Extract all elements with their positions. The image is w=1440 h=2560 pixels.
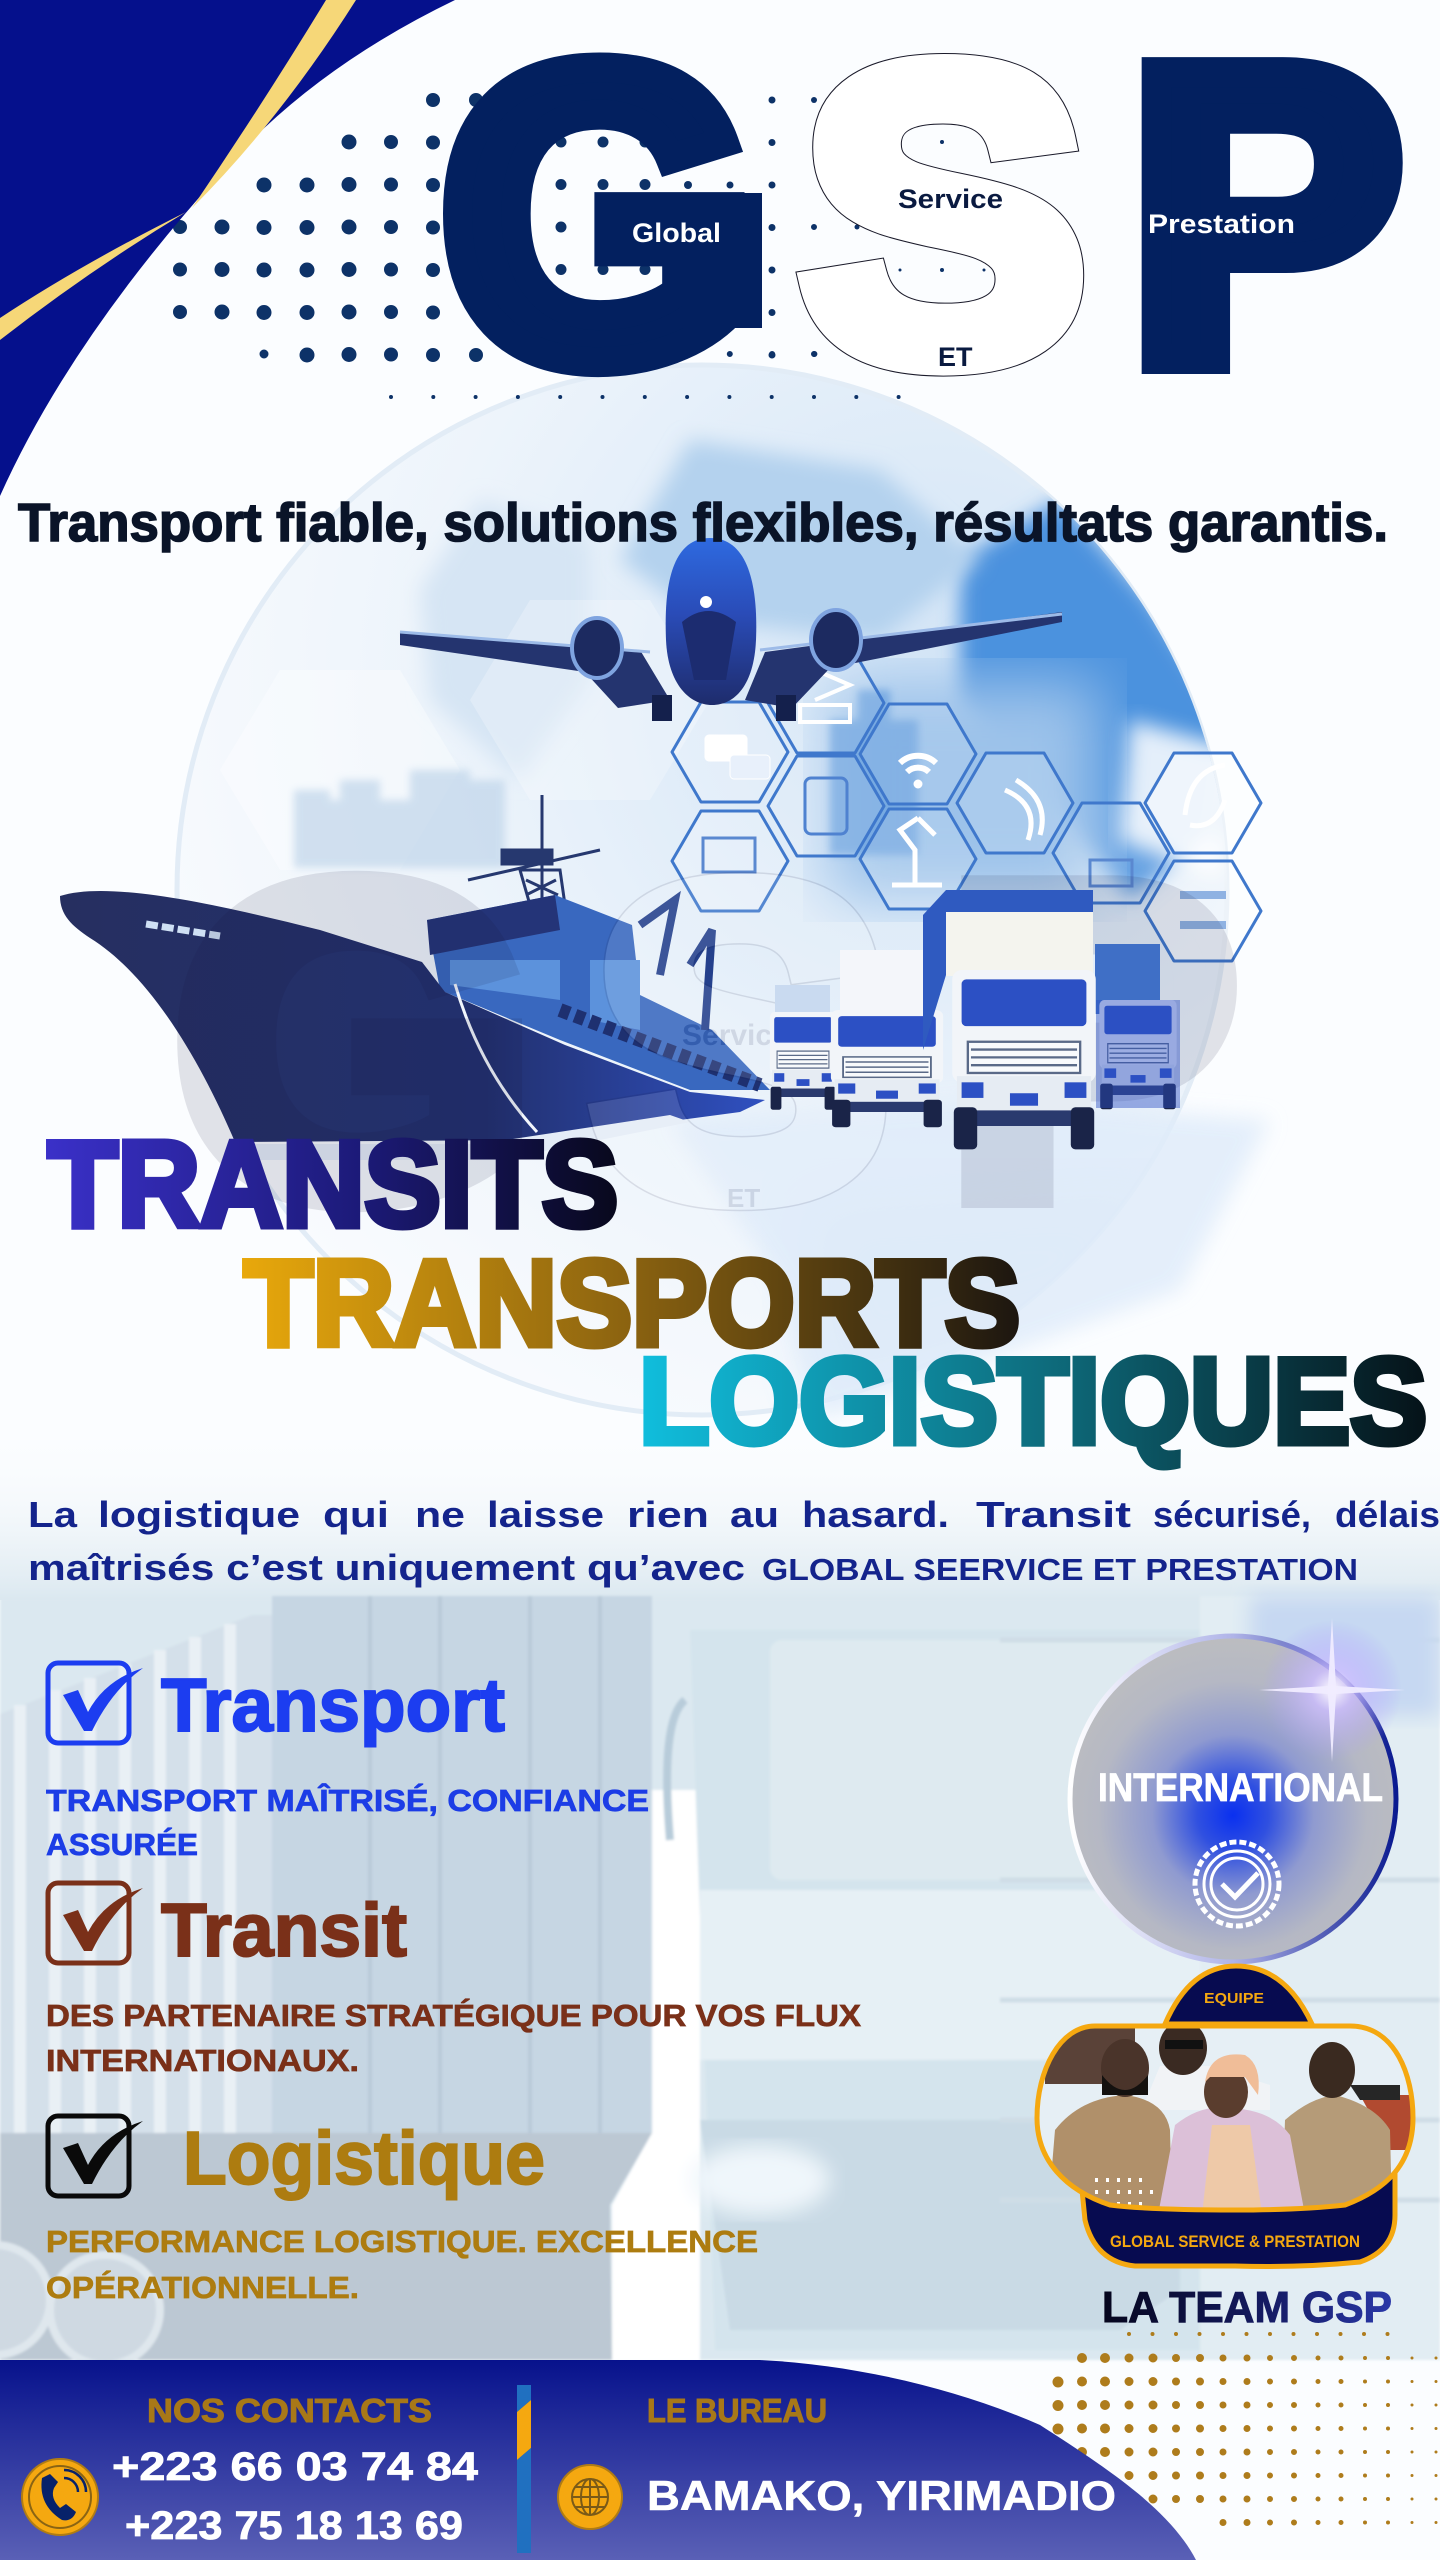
main truck <box>923 890 1096 1149</box>
container side <box>0 1615 280 2133</box>
office address: BAMAKO, YIRIMADIO <box>647 2472 1116 2519</box>
footer panel <box>0 2360 1196 2560</box>
right truck <box>1095 944 1180 1109</box>
team photo frame <box>1030 1966 1420 2266</box>
swoosh top left <box>0 0 455 496</box>
item: transport: Transport <box>161 1663 505 1747</box>
headline: transits: TRANSITS <box>48 1116 618 1252</box>
intro paragraph: laisse <box>487 1494 604 1535</box>
intro paragraph: au <box>730 1494 779 1535</box>
hexagon icons <box>703 670 1226 925</box>
dotted pattern <box>180 100 984 360</box>
ghost GSP watermark: S <box>590 796 890 1287</box>
ghost GSP watermark: P <box>947 796 1237 1287</box>
international badge: INTERNATIONAL <box>1098 1766 1383 1810</box>
airplane <box>400 538 1062 721</box>
white gap <box>612 1790 700 2360</box>
top banner <box>1165 1966 1312 2024</box>
wings <box>400 632 670 708</box>
ghost GSP watermark: ET <box>727 1183 760 1213</box>
ghost GSP watermark: S <box>590 796 890 1287</box>
city skyline <box>294 770 505 868</box>
intro paragraph: La <box>28 1494 78 1535</box>
divider <box>517 2385 531 2553</box>
letter S: ET <box>938 342 973 372</box>
second truck <box>831 950 943 1127</box>
icon: globe <box>558 2465 622 2529</box>
engines <box>572 618 622 678</box>
intro paragraph: ne <box>415 1494 465 1535</box>
item: transit: DES PARTENAIRE STRATÉGIQUE POUR VOS FLUX <box>46 1998 861 2033</box>
chassis <box>0 2133 652 2360</box>
mast <box>468 795 600 905</box>
globe <box>177 365 1240 1415</box>
item: logistique <box>46 2116 758 2305</box>
trucks <box>770 890 1180 1149</box>
hull <box>60 891 765 1142</box>
icon: check <box>48 1883 143 1963</box>
contacts heading: NOS CONTACTS <box>147 2392 432 2429</box>
item: transit <box>46 1883 861 2078</box>
intro paragraph: délais <box>1335 1494 1440 1535</box>
ghost GSP watermark: Service <box>682 1019 789 1052</box>
intro paragraph: hasard. <box>802 1494 949 1535</box>
hexagon network <box>672 653 1261 961</box>
fuselage <box>666 538 756 705</box>
container rear <box>272 1596 652 2136</box>
continents <box>220 440 1240 1400</box>
icon: seal check <box>1195 1842 1279 1926</box>
icon: check <box>48 2116 143 2196</box>
phone numbers: +223 66 03 74 84 <box>112 2445 479 2489</box>
landing gear <box>652 695 672 721</box>
intro paragraph: Transit <box>976 1494 1131 1535</box>
phone numbers <box>112 2445 479 2548</box>
photo of team <box>1040 2028 1410 2208</box>
dotted rows <box>264 354 900 397</box>
la team gsp: LA TEAM GSP <box>1102 2283 1392 2332</box>
bottom truck photo background <box>0 1420 1440 2365</box>
item: transit: INTERNATIONAUX. <box>46 2043 359 2078</box>
intro paragraph: qui <box>323 1494 389 1535</box>
intro paragraph: logistique <box>98 1494 300 1535</box>
tagline: Transport fiable, solutions flexibles, résultats garantis. <box>18 493 1388 553</box>
item: transport: ASSURÉE <box>46 1827 198 1862</box>
intro paragraph <box>28 1494 1440 1588</box>
bottom banner: GLOBAL SERVICE & PRESTATION <box>1110 2232 1360 2251</box>
item: transport: TRANSPORT MAÎTRISÉ, CONFIANCE <box>46 1782 649 1818</box>
intro paragraph: rien <box>627 1494 709 1535</box>
ghost GSP watermark <box>174 796 1237 1287</box>
item: transport <box>46 1663 649 1862</box>
letter G: Global <box>632 218 721 248</box>
bottom banner <box>1080 2170 1395 2266</box>
ghost GSP watermark: G <box>174 796 535 1287</box>
superstructure <box>427 895 770 1090</box>
item: logistique: Logistique <box>183 2116 545 2200</box>
letter S: Service <box>898 184 1003 214</box>
dock <box>235 1115 690 1160</box>
ship <box>60 795 770 1160</box>
item: logistique: OPÉRATIONNELLE. <box>46 2270 359 2305</box>
top banner: EQUIPE <box>1204 1990 1264 2007</box>
far truck <box>770 985 836 1110</box>
mooring rope <box>455 984 537 1132</box>
intro paragraph: GLOBAL SEERVICE ET PRESTATION <box>762 1552 1358 1587</box>
GSP logo <box>441 0 1402 448</box>
icon: phone <box>22 2459 98 2535</box>
headline: transports: TRANSPORTS <box>244 1235 1020 1371</box>
gold stripe <box>192 0 356 208</box>
item: logistique: PERFORMANCE LOGISTIQUE. EXCELLENCE <box>46 2224 758 2259</box>
truck cab <box>690 1630 1210 2350</box>
icon: check <box>48 1663 143 1743</box>
right side lines <box>1200 1596 1440 2360</box>
phone numbers: +223 75 18 13 69 <box>125 2504 463 2548</box>
road <box>670 1100 1270 1420</box>
office heading: LE BUREAU <box>647 2392 827 2429</box>
intro paragraph: sécurisé, <box>1153 1494 1311 1535</box>
item: transit: Transit <box>161 1888 407 1972</box>
sparkle <box>1259 1618 1405 1762</box>
international badge <box>1070 1618 1405 1962</box>
gold dots <box>1058 2334 1436 2530</box>
letter P: Prestation <box>1148 209 1295 239</box>
intro paragraph: maîtrisés c’est uniquement qu’avec <box>28 1547 745 1588</box>
